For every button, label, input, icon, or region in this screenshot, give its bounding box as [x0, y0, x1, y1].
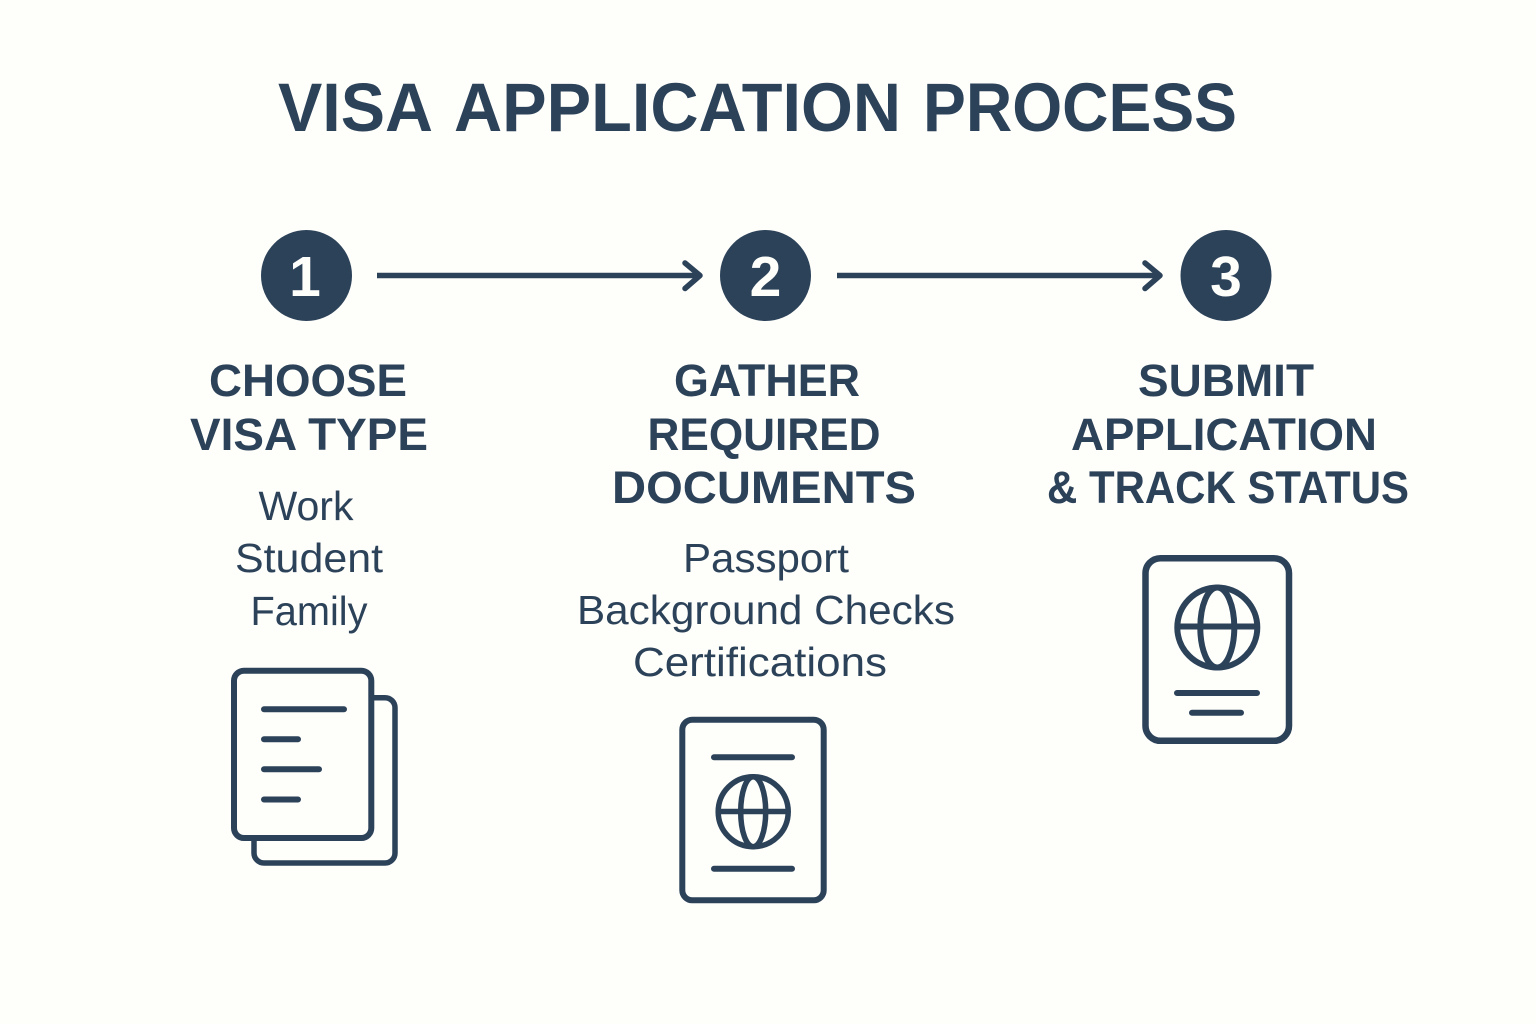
- title: VISA: [278, 69, 433, 146]
- step 1 number badge: [261, 230, 352, 321]
- step 1 list: Family: [250, 588, 368, 634]
- step 2 heading: [612, 355, 916, 513]
- step 1 heading: CHOOSE: [209, 355, 407, 406]
- step 1 heading: VISA TYPE: [190, 409, 428, 460]
- step 2 heading: REQUIRED: [648, 409, 880, 460]
- step 1 list: [235, 483, 384, 634]
- step 2 list: Background Checks: [577, 587, 955, 633]
- step 3 number badge: [1180, 230, 1272, 321]
- step 3 number badge: 3: [1210, 245, 1242, 309]
- step 3 heading: & TRACK STATUS: [1047, 462, 1409, 513]
- step 2 number badge: [720, 230, 811, 321]
- step 2 list: Certifications: [633, 639, 887, 685]
- step 1 list: Student: [235, 535, 384, 581]
- step 3 heading: SUBMIT: [1138, 355, 1314, 406]
- icon: passport with globe, step 2: [682, 720, 824, 900]
- icon: passport with globe, step 3: [1146, 558, 1289, 741]
- step 2 heading: GATHER: [674, 355, 860, 406]
- step 2 list: Passport: [683, 535, 850, 581]
- step 3 heading: APPLICATION: [1071, 409, 1377, 460]
- title: APPLICATION: [454, 69, 901, 146]
- step 2 heading: DOCUMENTS: [612, 462, 916, 513]
- step 1 heading: [190, 355, 428, 460]
- title: PROCESS: [923, 69, 1237, 146]
- step 3 heading: [1047, 355, 1409, 513]
- step 1 list: Work: [258, 483, 354, 529]
- arrow from step 1 to step 2: [377, 263, 700, 288]
- icon: stacked documents: [234, 671, 395, 863]
- title: [278, 69, 1237, 146]
- arrow from step 2 to step 3: [837, 263, 1160, 288]
- step 2 list: [577, 535, 955, 685]
- step 2 number badge: 2: [750, 245, 781, 309]
- step 1 number badge: 1: [289, 245, 321, 309]
